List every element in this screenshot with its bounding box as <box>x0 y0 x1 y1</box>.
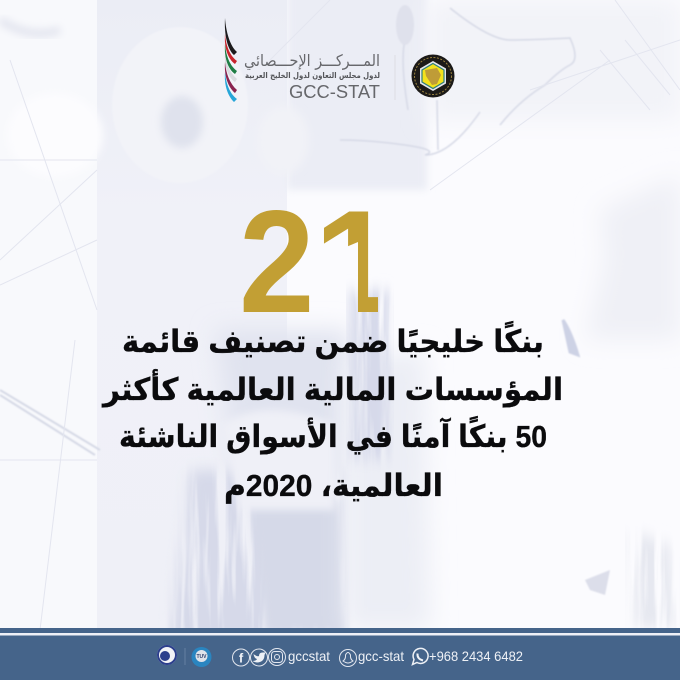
icon: TUV mark: TUV <box>196 654 207 660</box>
text block: main statement: المؤسسات المالية العالمية كأكثر <box>101 369 563 408</box>
divider <box>184 648 186 665</box>
icon: ISO mark <box>157 645 177 665</box>
icon: snapchat <box>340 650 356 666</box>
text block: main statement <box>101 321 563 504</box>
icon: GCC emblem <box>412 54 454 98</box>
text block: main statement: بنكًا خليجيًا ضمن تصنيف قائمة <box>122 321 544 360</box>
icon: facebook: f <box>239 650 244 666</box>
logo divider <box>394 55 396 100</box>
text block: main statement: 50 بنكًا آمنًا في الأسواق الناشئة <box>119 416 547 455</box>
icon: facebook <box>232 649 250 666</box>
handle: gccstat: gccstat <box>288 648 330 664</box>
number: 21: 1 <box>314 180 395 343</box>
icon: instagram <box>268 648 286 666</box>
handle: gcc-stat: gcc-stat <box>358 648 404 664</box>
icon: whatsapp <box>412 648 428 664</box>
logo: GCC-STAT wordmark <box>244 51 380 102</box>
number: 21 <box>244 210 378 312</box>
text block: main statement: العالمية، 2020م <box>224 468 443 504</box>
number: 21: 2 <box>239 179 315 343</box>
phone number: +968 2434 6482 <box>429 648 523 664</box>
icon: TUV mark <box>192 647 212 667</box>
logo: GCC-STAT wordmark: لدول مجلس التعاون لدول الخليج العربية <box>245 71 380 81</box>
footer bar <box>0 628 680 680</box>
logo: GCC-STAT wordmark: المـــركـــز الإحـــصائي <box>244 51 380 71</box>
logo: GCC-STAT ribbon <box>225 18 237 102</box>
icon: twitter <box>250 649 268 666</box>
logo: GCC-STAT wordmark: GCC-STAT <box>289 81 380 102</box>
